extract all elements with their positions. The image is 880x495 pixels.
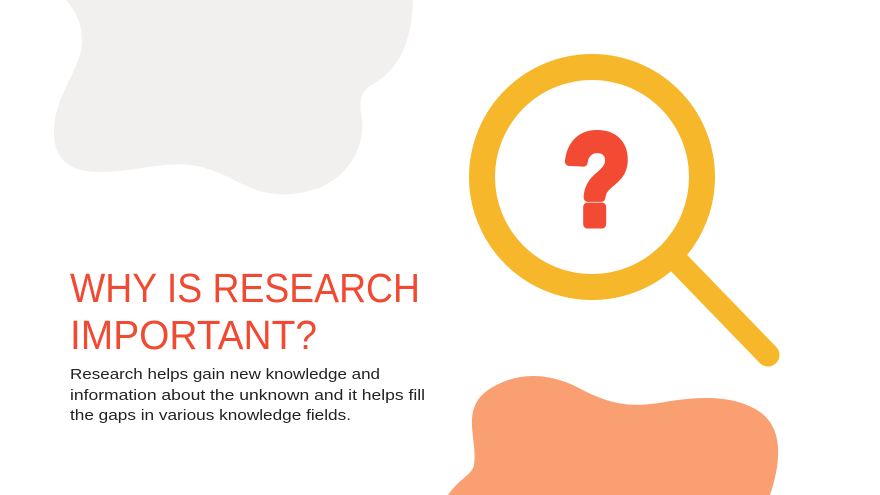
magnifier ring: [482, 67, 702, 287]
icon: magnifying glass: [482, 67, 768, 355]
body text: information about the unknown and it helps fill: [70, 387, 425, 404]
body text: [70, 366, 425, 424]
blob: grey top-left: [54, 0, 413, 194]
title: [70, 265, 420, 358]
body text: Research helps gain new knowledge and: [70, 366, 380, 383]
question mark: ?: [564, 109, 630, 252]
magnifier handle: [678, 262, 768, 355]
title: IMPORTANT?: [70, 312, 317, 358]
blob: orange bottom: [448, 376, 778, 495]
title: WHY IS RESEARCH: [70, 265, 420, 311]
body text: the gaps in various knowledge fields.: [70, 407, 351, 424]
